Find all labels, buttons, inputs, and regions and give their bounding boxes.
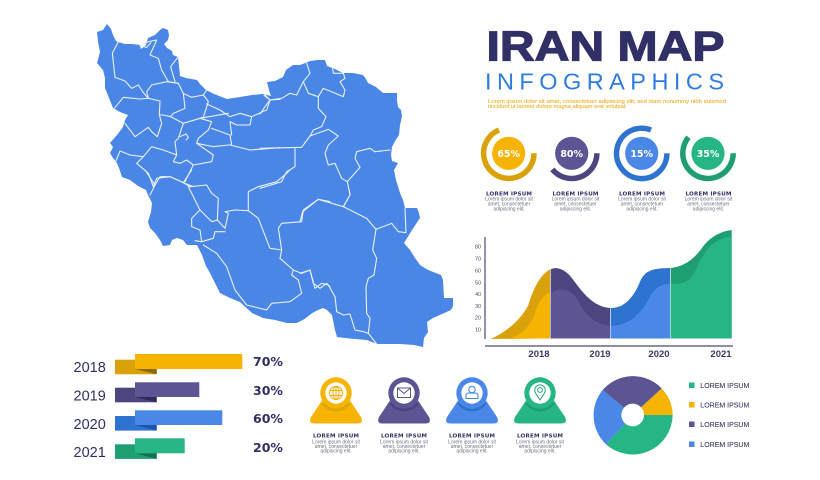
pin: location: amet, consectetuer <box>519 444 562 450</box>
bar: 2018: 2018 <box>74 360 106 376</box>
donut pie chart <box>594 376 673 455</box>
bar: 2020: 2020 <box>74 417 106 433</box>
donut: 80%: LOREM IPSUM <box>552 192 599 198</box>
bar chart <box>74 354 283 461</box>
icon: globe <box>330 386 342 400</box>
subtitle: INFOGRAPHICS <box>485 68 724 94</box>
donut: 80%: adipiscing elit. <box>560 206 591 212</box>
y axis labels: 60 <box>475 268 481 274</box>
donut: 35% <box>683 137 733 212</box>
bar: 2018: 70% <box>253 354 283 369</box>
intro text <box>488 99 726 110</box>
northeast province borders <box>260 63 390 207</box>
donut: 15%: Lorem ipsum dolor sit <box>618 196 667 202</box>
pin: person: amet, consectetuer <box>451 444 494 450</box>
map outline <box>97 24 453 347</box>
pin: globe: amet, consectetuer <box>315 444 358 450</box>
donut: 80% <box>552 137 600 212</box>
pin: globe: LOREM IPSUM <box>313 434 359 440</box>
y axis labels: 40 <box>475 292 481 298</box>
bar: 2020: 60% <box>253 411 283 426</box>
pin: envelope: LOREM IPSUM <box>381 434 427 440</box>
chart areas <box>491 230 732 339</box>
icon: envelope <box>398 388 410 398</box>
chart axes <box>485 237 733 346</box>
donut: 65%: Lorem ipsum dolor sit <box>485 196 534 202</box>
bar: 2019: 30% <box>253 383 283 398</box>
pin: globe <box>310 377 362 454</box>
pin: location <box>514 377 566 454</box>
southwest province borders <box>145 170 330 310</box>
pin: location: LOREM IPSUM <box>517 434 563 440</box>
donut: 15% <box>617 128 667 212</box>
pin: person: adipiscing elit. <box>456 448 488 454</box>
donut: 65%: adipiscing elit. <box>493 206 525 212</box>
southeast province borders <box>300 190 406 344</box>
donut: 15%: LOREM IPSUM <box>619 192 665 198</box>
bar: 2021: 2021 <box>74 445 106 461</box>
bar: 2020 <box>74 410 283 433</box>
donut: 15%: adipiscing elit. <box>626 206 658 212</box>
intro text: Lorem ipsum dolor sit amet, consectetuer adipiscing elit, sed diam nonummy nibh euismod <box>488 99 726 105</box>
y axis labels: 70 <box>475 257 481 263</box>
donut: 35%: LOREM IPSUM <box>686 192 732 198</box>
donut: 65%: 65% <box>497 149 521 160</box>
donut: 80%: 80% <box>560 149 584 160</box>
map: Iran provinces <box>97 24 453 347</box>
y axis labels: 10 <box>475 327 481 333</box>
pin: location: adipiscing elit. <box>524 448 556 454</box>
bar: 2019 <box>74 382 283 404</box>
intro text: tincidunt ut laoreet dolore magna aliquam erat volutpat. <box>488 104 627 110</box>
x axis labels: 2019 <box>589 349 611 360</box>
donut: 15%: amet, consectetuer <box>621 202 664 208</box>
x axis labels: 2018 <box>528 349 550 360</box>
pin: person: Lorem ipsum dolor sit <box>448 440 497 446</box>
northwest province borders <box>112 40 280 187</box>
pie legend: LOREM IPSUM <box>700 442 749 449</box>
pin: envelope: amet, consectetuer <box>383 444 426 450</box>
coastal inlet <box>297 313 314 324</box>
bar: 2019: 2019 <box>74 388 106 404</box>
donut: 65%: amet, consectetuer <box>488 202 531 208</box>
pin: envelope: Lorem ipsum dolor sit <box>380 440 429 446</box>
donut: 65% <box>484 130 534 212</box>
pie legend: LOREM IPSUM <box>700 383 749 390</box>
y axis labels: 20 <box>475 316 481 322</box>
pin: location: Lorem ipsum dolor sit <box>516 440 565 446</box>
pin: person <box>446 377 498 454</box>
pie legend <box>689 382 749 449</box>
y axis labels <box>475 245 481 333</box>
bar: 2018 <box>74 354 283 376</box>
title: IRAN MAP <box>486 22 724 69</box>
donut: 65%: LOREM IPSUM <box>486 192 532 198</box>
pie legend: LOREM IPSUM <box>700 422 749 429</box>
y axis labels: 50 <box>475 280 481 286</box>
x axis labels: 2021 <box>710 349 732 360</box>
pin: person: LOREM IPSUM <box>449 434 495 440</box>
donut: 35%: amet, consectetuer <box>687 202 730 208</box>
donut: 80%: amet, consectetuer <box>554 202 597 208</box>
pin: envelope: adipiscing elit. <box>388 448 420 454</box>
donut: 35%: 35% <box>697 149 720 160</box>
donut: 80%: Lorem ipsum dolor sit <box>552 196 600 202</box>
donut: 35%: adipiscing elit. <box>693 206 724 212</box>
donut: 15%: 15% <box>630 149 654 160</box>
y axis labels: 80 <box>475 245 481 251</box>
bar: 2021: 20% <box>253 440 283 455</box>
y axis labels: 30 <box>475 304 481 310</box>
pin: globe: Lorem ipsum dolor sit <box>312 440 361 446</box>
area chart <box>475 230 733 360</box>
pin: globe: adipiscing elit. <box>320 448 352 454</box>
x axis labels <box>528 349 732 360</box>
icon: location marker <box>535 385 545 400</box>
icon: person <box>466 386 478 398</box>
bar: 2021 <box>74 438 283 461</box>
pin: envelope <box>378 377 430 454</box>
pie legend: LOREM IPSUM <box>700 402 749 409</box>
x axis labels: 2020 <box>648 349 670 360</box>
donut: 35%: Lorem ipsum dolor sit <box>685 196 733 202</box>
